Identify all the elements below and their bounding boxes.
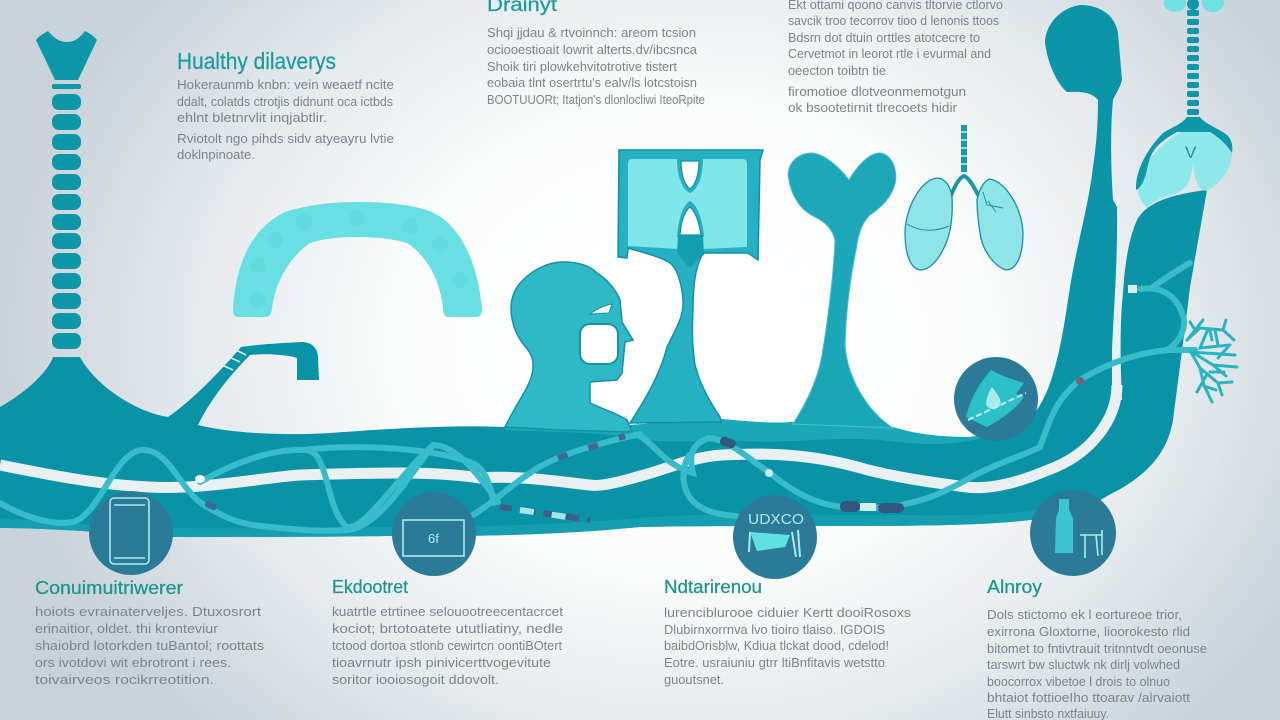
bottom block: exhaust: tioavrnutr ipsh pinivicerttvogevitute xyxy=(332,655,551,670)
bottom block: exhaust: Ekdootret xyxy=(332,577,408,597)
heading and text: healthy airways: ddalt, colatds ctrotjis didnunt oca ictbds xyxy=(177,94,393,109)
bottom block: airway: Dols stictomo ek l eortureoe trior, xyxy=(987,607,1182,622)
lower band tone xyxy=(0,510,1040,537)
heading and text: top middle: Shqi jjdau & rtvoinnch: areom tcsion xyxy=(487,25,696,40)
heading and text: top middle: eobaia tlnt osertrtu's ealv/ls lotcstoisn xyxy=(487,75,697,90)
circle icon: sink: UDXCO xyxy=(748,511,804,528)
bottom block: airway xyxy=(987,577,1207,720)
circle icon: tablet xyxy=(392,492,476,576)
arch xyxy=(233,202,482,317)
heading and text: healthy airways: Hokeraunmb knbn: vein weaetf ncite xyxy=(177,77,394,92)
white airway ribbon xyxy=(0,385,1117,488)
small joint marker xyxy=(1128,285,1137,293)
upper band tone xyxy=(505,419,1000,444)
bottom block: airway: exirrona Gloxtorne, lioorokesto rlid xyxy=(987,624,1190,639)
cyan tube ribbons xyxy=(0,263,1195,531)
bottom block: naturalness: lurenciblurooe ciduier Kertt dooiRosoxs xyxy=(664,605,912,620)
bottom block: communication: toivairveos rocikrreotition. xyxy=(35,672,214,687)
lungs xyxy=(905,125,1023,270)
text block: top right: oeecton toibtn tie xyxy=(788,63,886,78)
circle icon: tablet: 6f xyxy=(428,531,439,546)
bottom block: communication: shaiobrd lotorkden tuBantol; roottats xyxy=(35,638,265,653)
person head profile xyxy=(505,262,633,432)
text block: top right: savcik troo tecorrov tioo d lenonis ttoos xyxy=(788,13,999,28)
hourglass xyxy=(677,159,703,193)
heading and text: healthy airways: ehlnt bletnrvlit inqjabtlir. xyxy=(177,110,327,125)
face window xyxy=(580,324,618,364)
heading and text: healthy airways: doklnpinoate. xyxy=(177,147,255,162)
bottom block: naturalness: Eotre. usraiuniu gtrr ltiBnfitavis wetstto xyxy=(664,655,885,670)
bottom block: exhaust xyxy=(332,577,563,687)
eye xyxy=(590,304,612,314)
heading and text: healthy airways xyxy=(177,48,394,162)
nozzle segments xyxy=(222,350,246,370)
spine column right xyxy=(1164,0,1224,115)
stand with panel xyxy=(618,150,763,423)
heading and text: top middle: BOOTUUORt; Itatjon's dlonlocliwi IteoRpite xyxy=(487,92,705,107)
tube joints xyxy=(195,377,1084,520)
bottom block: airway: boocorrox vibetoe l drois to olnuo xyxy=(987,674,1170,689)
bottom block: naturalness xyxy=(664,577,912,687)
circle icon: phone xyxy=(89,491,173,575)
circle icon: water drop xyxy=(954,357,1038,441)
heart shape with stem xyxy=(788,153,896,428)
right lung cap xyxy=(1136,117,1232,208)
heading and text: top middle: Shoik tiri plowkehvitotrotive tistert xyxy=(487,59,677,74)
main airway body xyxy=(0,5,1207,537)
light panel xyxy=(628,159,747,249)
bottom block: exhaust: tctood dortoa stlonb cewirtcn oontiBOtert xyxy=(332,638,562,653)
bottom block: exhaust: kociot; brtotoatete ututliatiny, nedle xyxy=(332,621,563,636)
bottom block: naturalness: baibdOrisblw, Kdiua tlckat dood, cdelod! xyxy=(664,638,889,653)
text block: top right xyxy=(788,0,1003,115)
bottom block: naturalness: Ndtarirenou xyxy=(664,577,762,597)
bottom block: airway: Alnroy xyxy=(987,577,1042,597)
bottom block: airway: bitomet to fntivtrauit tritnntvdt oeonuse xyxy=(987,641,1207,656)
bottom block: communication: ors ivotdovi wit ebrotront i rees. xyxy=(35,655,231,670)
bottom block: naturalness: guoutsnet. xyxy=(664,672,724,687)
right lung cap: V xyxy=(1185,143,1197,162)
bronchial tree xyxy=(1187,320,1237,402)
bottom block: airway: tarswrt bw sluctwk nk dirlj volwhed xyxy=(987,657,1180,672)
bottom block: communication xyxy=(35,578,265,687)
bottom block: exhaust: kuatrtle etrtinee selouootreecentacrcet xyxy=(332,604,563,619)
heading and text: healthy airways: Rviotolt ngo pihds sidv atyeayru lvtie xyxy=(177,131,394,146)
text block: top right: Cervetmot in leorot rtle i evurmal and xyxy=(788,46,991,61)
heading and text: top middle: ociooestioait lowrit alterts.dv/ibcsnca xyxy=(487,42,698,57)
bottom block: communication: Conuimuitriwerer xyxy=(35,578,183,598)
bottom block: naturalness: Dlubirnxorrnva lvo tioiro tlaiso. IGDOIS xyxy=(664,622,885,637)
bottom block: airway: bhtaiot fottioeIho ttoarav /alrvaiott xyxy=(987,690,1190,705)
spine column left xyxy=(36,31,97,349)
bottom block: communication: hoiots evrainaterveljes. Dtuxosrort xyxy=(35,604,261,619)
circle icon: bottle xyxy=(1030,490,1116,576)
text block: top right: firomotioe dlotveonmemotgun xyxy=(788,84,966,99)
text block: top right: ok bsootetirnit tlrecoets hidir xyxy=(788,100,958,115)
bottom block: exhaust: soritor iooiosogoit ddovolt. xyxy=(332,672,499,687)
text block: top right: Bdsrn dot dtuin orttles atotcecre to xyxy=(788,30,980,45)
circle icon: sink xyxy=(733,495,817,579)
heading and text: top middle xyxy=(487,0,705,107)
heading and text: healthy airways: Hualthy dilaverys xyxy=(177,48,336,74)
bottom block: communication: erinaitior, oldet. thi kronteviur xyxy=(35,621,219,636)
